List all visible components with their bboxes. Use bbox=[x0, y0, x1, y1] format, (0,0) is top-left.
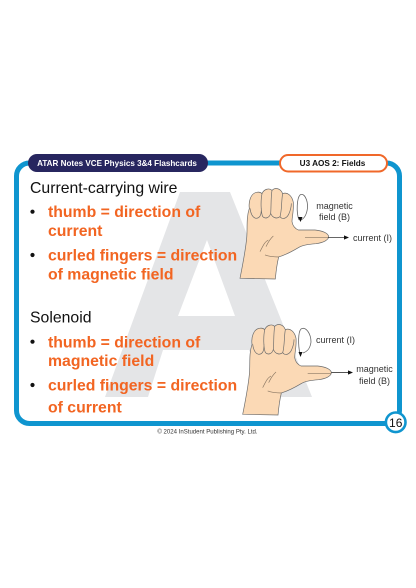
heading: current-carrying wire: Current-carrying wire bbox=[30, 180, 178, 197]
bullet list: current-carrying wire: of magnetic field bbox=[48, 266, 174, 284]
copyright footer: © 2024 InStudent Publishing Pty. Ltd. bbox=[157, 428, 258, 436]
page number badge bbox=[386, 412, 406, 432]
heading: solenoid: Solenoid bbox=[30, 310, 91, 327]
header pill: topic: U3 AOS 2: Fields bbox=[300, 159, 366, 168]
bullet list: solenoid bbox=[30, 334, 237, 416]
header pill: topic bbox=[280, 155, 387, 172]
arrow: curl around fingers bbox=[298, 328, 311, 357]
bullet list: solenoid: thumb = direction of bbox=[48, 334, 201, 351]
label: magnetic field: field (B) bbox=[359, 376, 390, 386]
label: current: current (I) bbox=[316, 335, 355, 345]
header pill: flashcards title bbox=[28, 154, 208, 172]
arrow: magnetic field out of thumb bbox=[331, 370, 353, 375]
bullet list: solenoid: of current bbox=[48, 399, 122, 416]
header pill: flashcards title: ATAR Notes VCE Physics 3&4 Flashcards bbox=[37, 159, 197, 168]
diagram: right hand for solenoid bbox=[243, 325, 393, 415]
bullet list: current-carrying wire: curled fingers = direction bbox=[48, 248, 237, 265]
label: current: current (I) bbox=[353, 233, 392, 243]
arrow: current out of thumb bbox=[328, 235, 349, 240]
card panel bbox=[16, 163, 400, 424]
watermark letter A bbox=[105, 192, 312, 397]
bullet list: solenoid: curled fingers = direction bbox=[48, 378, 237, 395]
bullet list: current-carrying wire: thumb = direction of bbox=[48, 204, 201, 221]
arrow: curl around fingers bbox=[297, 194, 308, 222]
label: magnetic field: field (B) bbox=[319, 212, 350, 222]
label: magnetic field: magnetic bbox=[356, 364, 393, 374]
page number badge: 16 bbox=[389, 416, 403, 430]
bullet list: solenoid: magnetic field bbox=[48, 353, 154, 370]
bullet list: current-carrying wire: current bbox=[48, 223, 103, 240]
diagram: right hand for wire bbox=[240, 189, 392, 279]
label: magnetic field: magnetic bbox=[316, 201, 353, 211]
bullet list: current-carrying wire bbox=[30, 204, 237, 284]
